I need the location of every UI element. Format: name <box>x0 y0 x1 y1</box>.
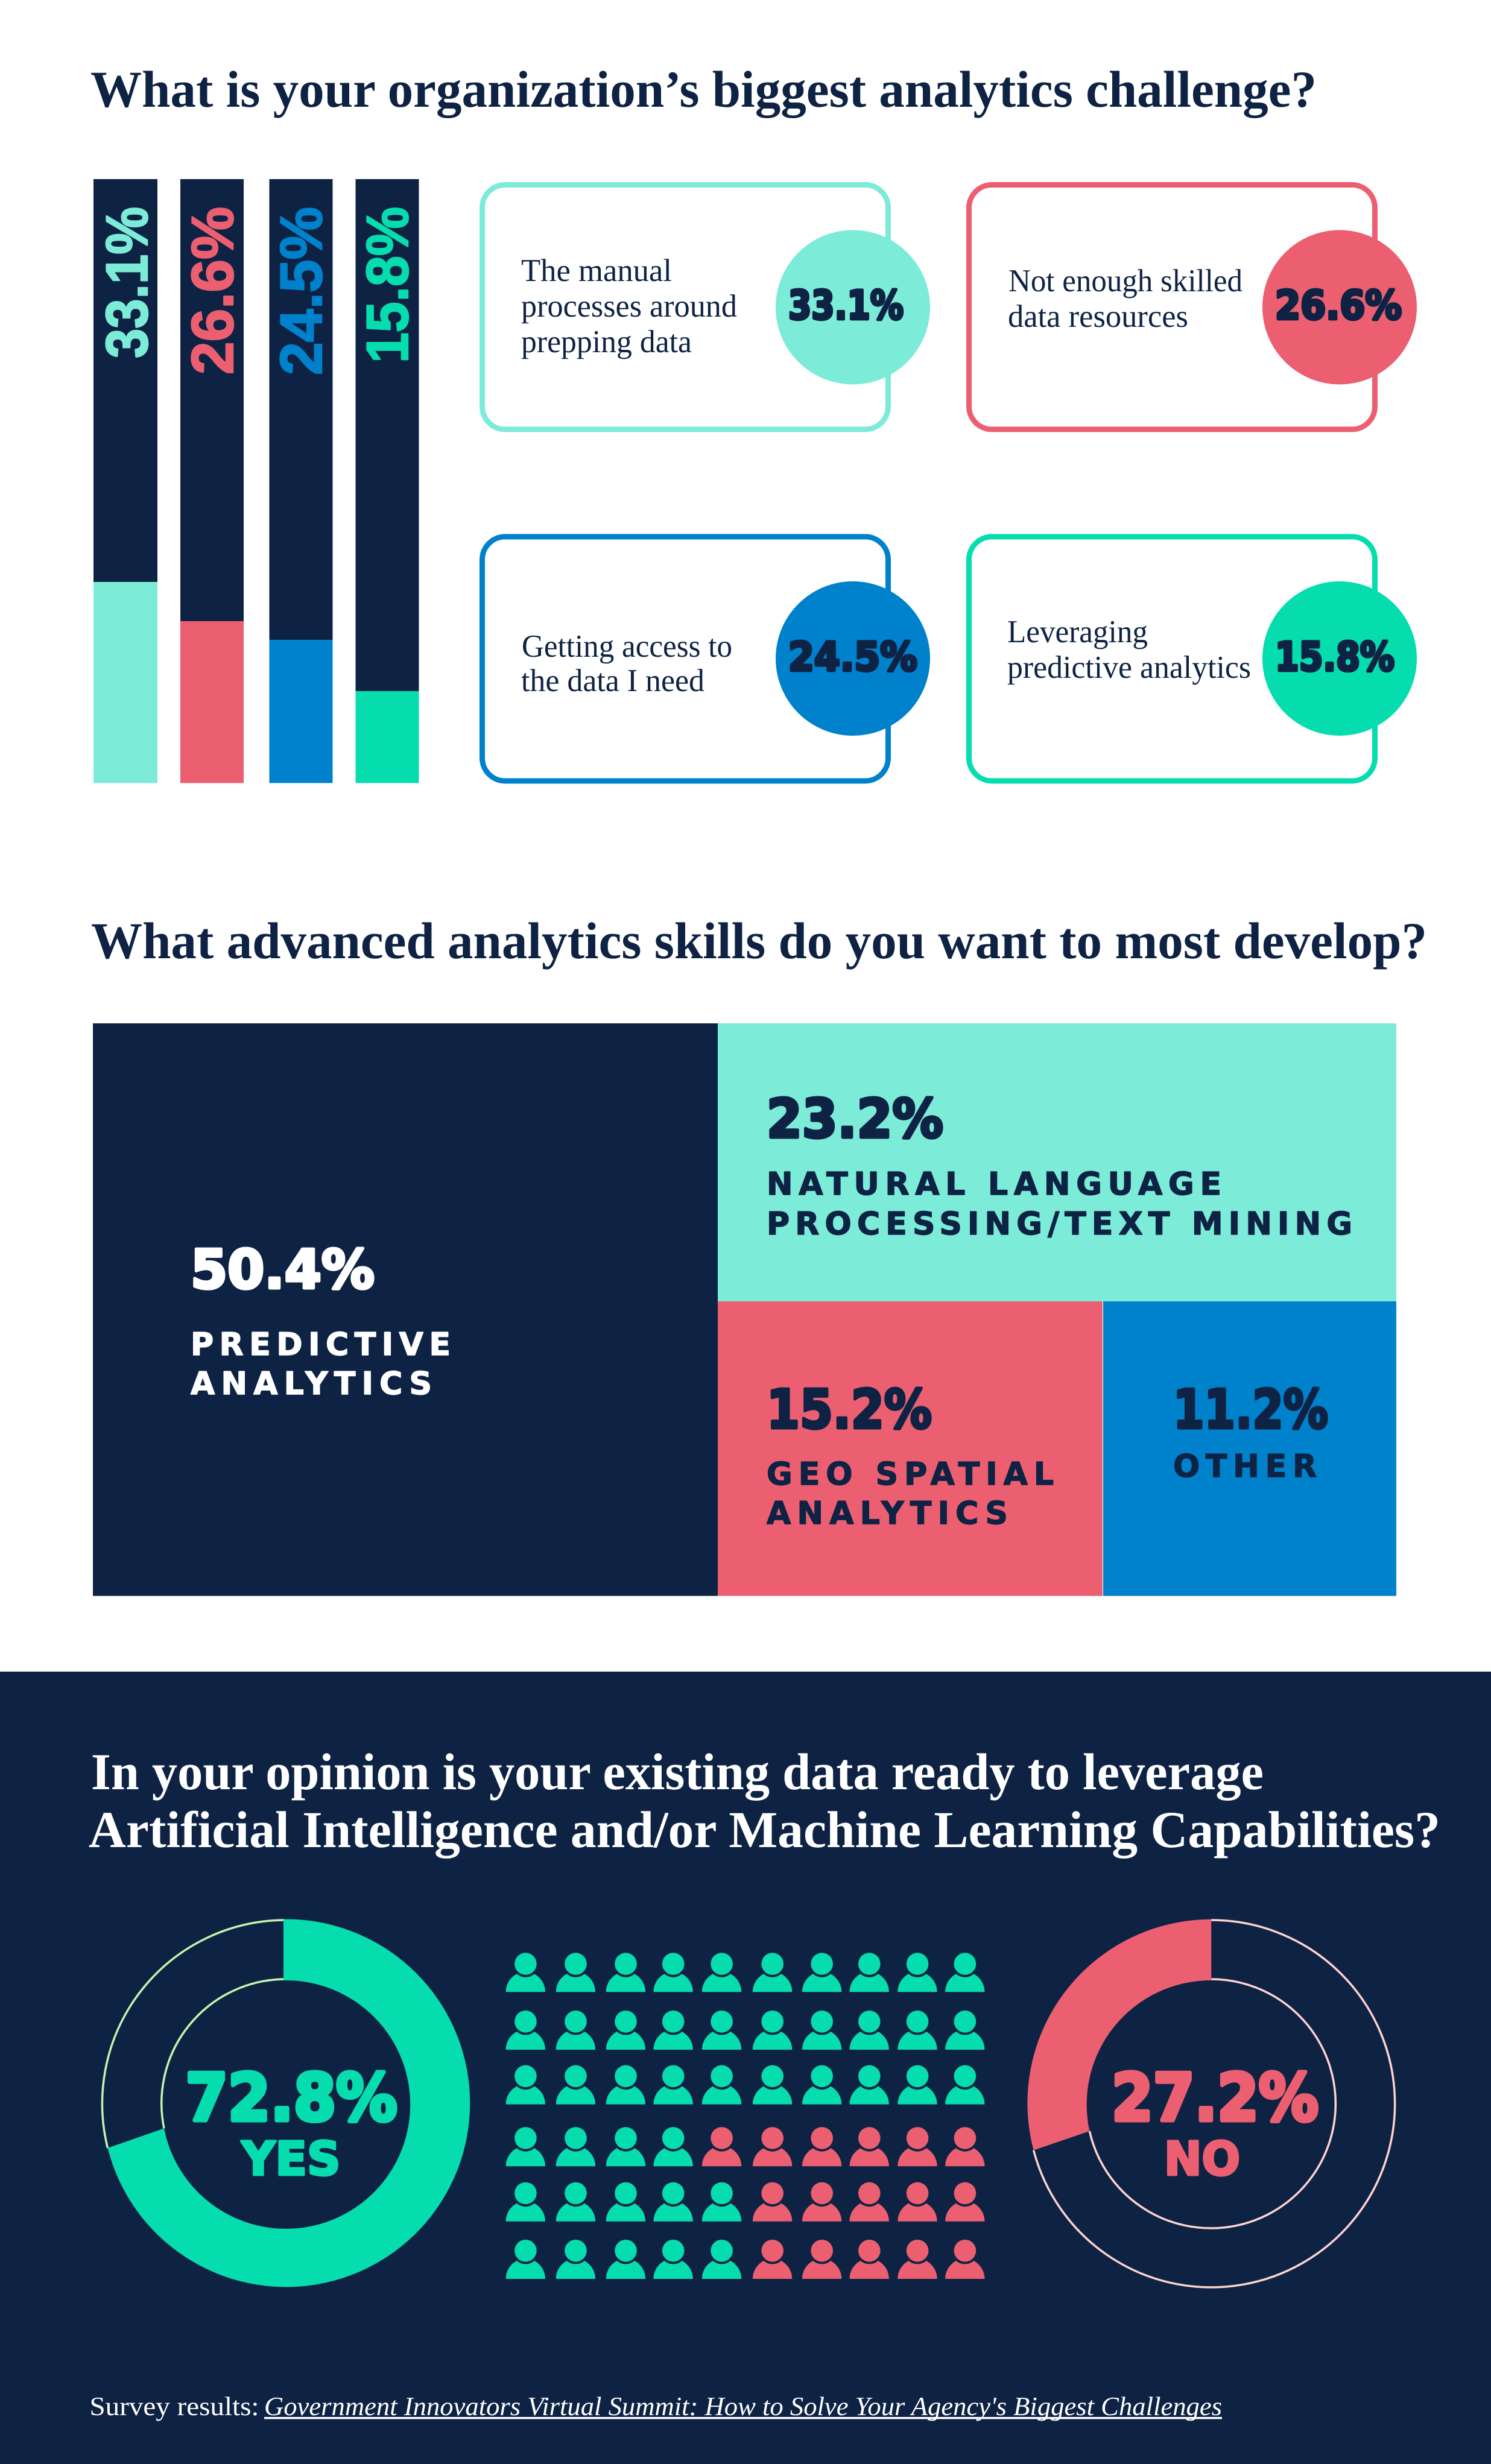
panel: skilled data resources card <box>969 185 1417 429</box>
circle badge: 26.6%: 26.6% <box>1275 282 1402 329</box>
tile: natural language processing 23.2%: PROCESSING/TEXT MINING <box>767 1206 1352 1242</box>
card text: manual processes: The manual <box>521 253 672 288</box>
title: AI readiness question <box>89 1743 1440 1859</box>
donut chart: yes 72.8%: YES <box>241 2132 340 2187</box>
people: green yes group <box>506 1953 984 2279</box>
tile: geo spatial analytics 15.2% <box>718 1301 1103 1596</box>
tile: other 11.2%: OTHER <box>1173 1448 1317 1485</box>
tile: natural language processing 23.2% <box>718 1023 1396 1301</box>
panel: dark AI readiness section <box>0 1672 1491 2464</box>
bar: 33.1% <box>93 179 160 783</box>
panel: manual processes card <box>483 185 930 429</box>
circle badge: 24.5%: 24.5% <box>788 634 917 680</box>
donut chart: no 27.2%: 27.2% <box>1112 2061 1318 2136</box>
card text: predictive analytics <box>1007 614 1251 685</box>
circle badge: 33.1% <box>776 230 930 385</box>
people: red no group <box>702 2127 984 2279</box>
panel: predictive analytics card <box>969 537 1417 781</box>
bar: 26.6%: 26.6% <box>179 207 245 374</box>
bar: 33.1%: 33.1% <box>93 207 160 358</box>
title: AI readiness question: In your opinion is your existing data ready to leverage <box>91 1743 1264 1801</box>
bar: 15.8% <box>354 179 420 783</box>
title: biggest analytics challenge: What is your organization’s biggest analytics challenge? <box>90 60 1317 118</box>
circle badge: 24.5% <box>776 581 930 736</box>
footer: survey source: Government Innovators Virtual Summit: How to Solve Your Agency's Biggest Challenges <box>264 2392 1222 2421</box>
donut chart: yes 72.8%: 72.8% <box>186 2061 397 2136</box>
tile: predictive analytics 50.4%: ANALYTICS <box>191 1366 432 1402</box>
card text: predictive analytics: predictive analytics <box>1007 650 1251 685</box>
tile: other 11.2%: 11.2% <box>1173 1378 1328 1441</box>
bar: 26.6% <box>179 179 245 783</box>
tile: geo spatial analytics 15.2%: ANALYTICS <box>767 1496 1008 1532</box>
card text: skilled resources <box>1008 264 1242 334</box>
donut chart: no 27.2% <box>1027 1919 1395 2287</box>
donut chart: no 27.2%: NO <box>1164 2132 1240 2187</box>
tile: natural language processing 23.2%: NATURAL LANGUAGE <box>767 1166 1221 1202</box>
bar: 24.5% <box>268 179 334 783</box>
donut chart: yes 72.8% <box>102 1919 470 2287</box>
card text: skilled resources: Not enough skilled <box>1008 264 1242 299</box>
tile: predictive analytics 50.4%: PREDICTIVE <box>191 1327 451 1363</box>
tile: geo spatial analytics 15.2%: GEO SPATIAL <box>767 1456 1054 1493</box>
tile: natural language processing 23.2%: 23.2% <box>767 1087 943 1150</box>
card text: skilled resources: data resources <box>1008 299 1188 334</box>
circle badge: 15.8%: 15.8% <box>1275 634 1394 680</box>
tile: geo spatial analytics 15.2%: 15.2% <box>767 1378 932 1441</box>
title: advanced analytics skills: What advanced analytics skills do you want to most develop? <box>91 912 1427 970</box>
bar chart: challenge percentages <box>93 179 420 783</box>
card text: data access <box>521 629 732 698</box>
tile: predictive analytics 50.4% <box>93 1023 718 1596</box>
circle badge: 26.6% <box>1262 230 1417 385</box>
circle badge: 33.1%: 33.1% <box>788 282 904 329</box>
card text: manual processes: prepping data <box>521 324 692 359</box>
bar: 15.8%: 15.8% <box>354 207 420 363</box>
circle badge: 15.8% <box>1262 581 1417 736</box>
card text: data access: the data I need <box>521 663 704 698</box>
bar: 24.5%: 24.5% <box>268 207 334 375</box>
pictogram: 60 people, 44 green and 16 red <box>506 1953 984 2279</box>
card text: data access: Getting access to <box>522 629 732 664</box>
card text: manual processes: processes around <box>521 289 737 324</box>
panel: data access card <box>483 537 930 781</box>
card text: manual processes <box>521 253 737 359</box>
treemap: skills to develop <box>93 1023 1396 1596</box>
footer: survey source: Survey results: <box>89 2392 259 2421</box>
tile: other 11.2% <box>1103 1301 1396 1596</box>
card text: predictive analytics: Leveraging <box>1007 614 1148 649</box>
title: AI readiness question: Artificial Intelligence and/or Machine Learning Capabilities? <box>89 1801 1440 1859</box>
tile: predictive analytics 50.4%: 50.4% <box>191 1238 375 1301</box>
